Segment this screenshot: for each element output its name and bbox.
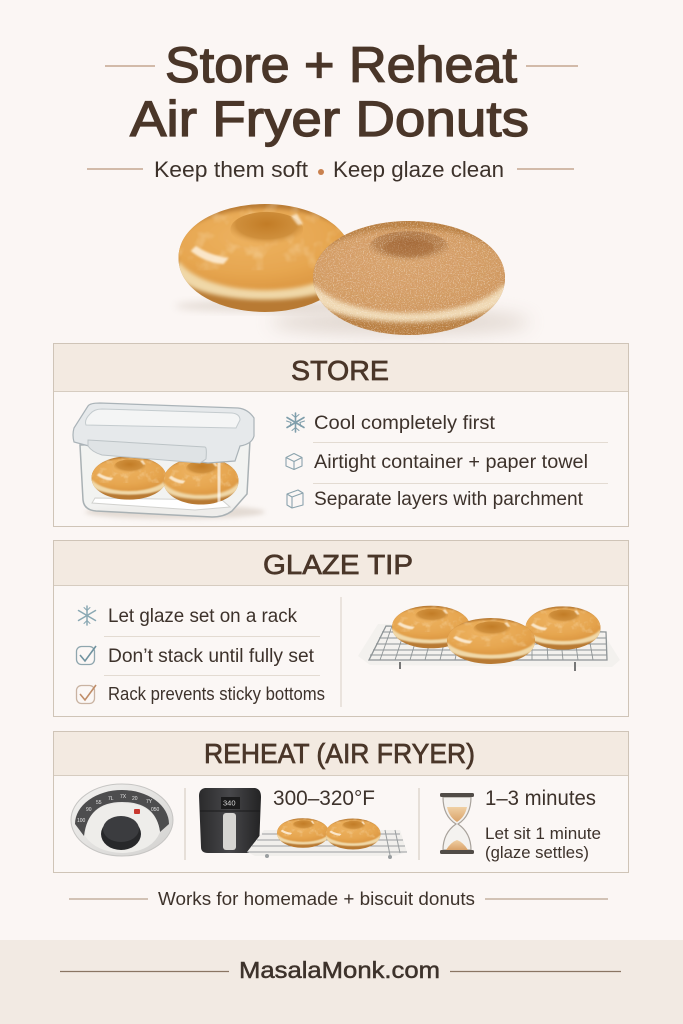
icon: temperature dial: 20 <box>132 796 138 802</box>
subtitle <box>87 157 574 182</box>
text: time <box>485 787 601 862</box>
heading: glaze tip <box>54 541 628 586</box>
icon: wire rack with two donuts <box>247 818 407 859</box>
text: temperature: 300–320°F <box>273 787 375 810</box>
title: Store + Reheat <box>165 37 517 93</box>
footer: MasalaMonk.com <box>239 957 440 983</box>
panel: glaze tip <box>54 540 628 716</box>
glaze item: rack: Let glaze set on a rack <box>108 606 297 627</box>
heading: reheat <box>54 732 628 776</box>
text: time: (glaze settles) <box>485 843 589 862</box>
subtitle: Keep glaze clean <box>333 157 504 182</box>
store item: cool: Cool completely first <box>314 413 496 434</box>
icon: temperature dial: 7Y <box>146 799 153 805</box>
icon: air fryer: 340 <box>223 798 236 808</box>
icon: hourglass <box>440 793 474 854</box>
subtitle: Keep them soft <box>154 157 308 182</box>
heading: store: STORE <box>291 355 389 386</box>
icon: food container with donuts <box>73 403 265 519</box>
footer <box>0 940 683 1024</box>
icon: temperature dial: 55 <box>96 800 102 806</box>
hero donuts <box>175 202 530 337</box>
icon: temperature dial: 050 <box>151 807 160 813</box>
store item: airtight: Airtight container + paper towel <box>314 452 588 473</box>
text: time: 1–3 minutes <box>485 787 596 810</box>
title: Air Fryer Donuts <box>130 91 529 147</box>
panel: reheat <box>54 732 628 872</box>
icon: glazed donut <box>175 202 355 314</box>
icon: cooling rack with three donuts <box>358 605 620 671</box>
panel: store <box>54 344 628 526</box>
title <box>105 37 578 147</box>
store item: layers: Separate layers with parchment <box>314 489 584 510</box>
heading: reheat: REHEAT (AIR FRYER) <box>204 738 475 769</box>
glaze item: sticky: Rack prevents sticky bottoms <box>108 684 325 704</box>
heading: store <box>54 344 628 392</box>
icon: temperature dial: 90 <box>86 807 92 813</box>
text: time: Let sit 1 minute <box>485 824 601 843</box>
icon: temperature dial: 7L <box>108 796 114 802</box>
note: Works for homemade + biscuit donuts <box>158 889 475 909</box>
icon: temperature dial <box>71 784 173 856</box>
icon: air fryer <box>199 788 261 853</box>
icon: temperature dial: 7X <box>120 794 127 800</box>
icon: temperature dial: 100 <box>77 818 86 824</box>
glaze item: stack: Don’t stack until fully set <box>108 646 315 667</box>
icon: sugared donut <box>309 219 509 337</box>
heading: glaze tip: GLAZE TIP <box>263 549 413 580</box>
